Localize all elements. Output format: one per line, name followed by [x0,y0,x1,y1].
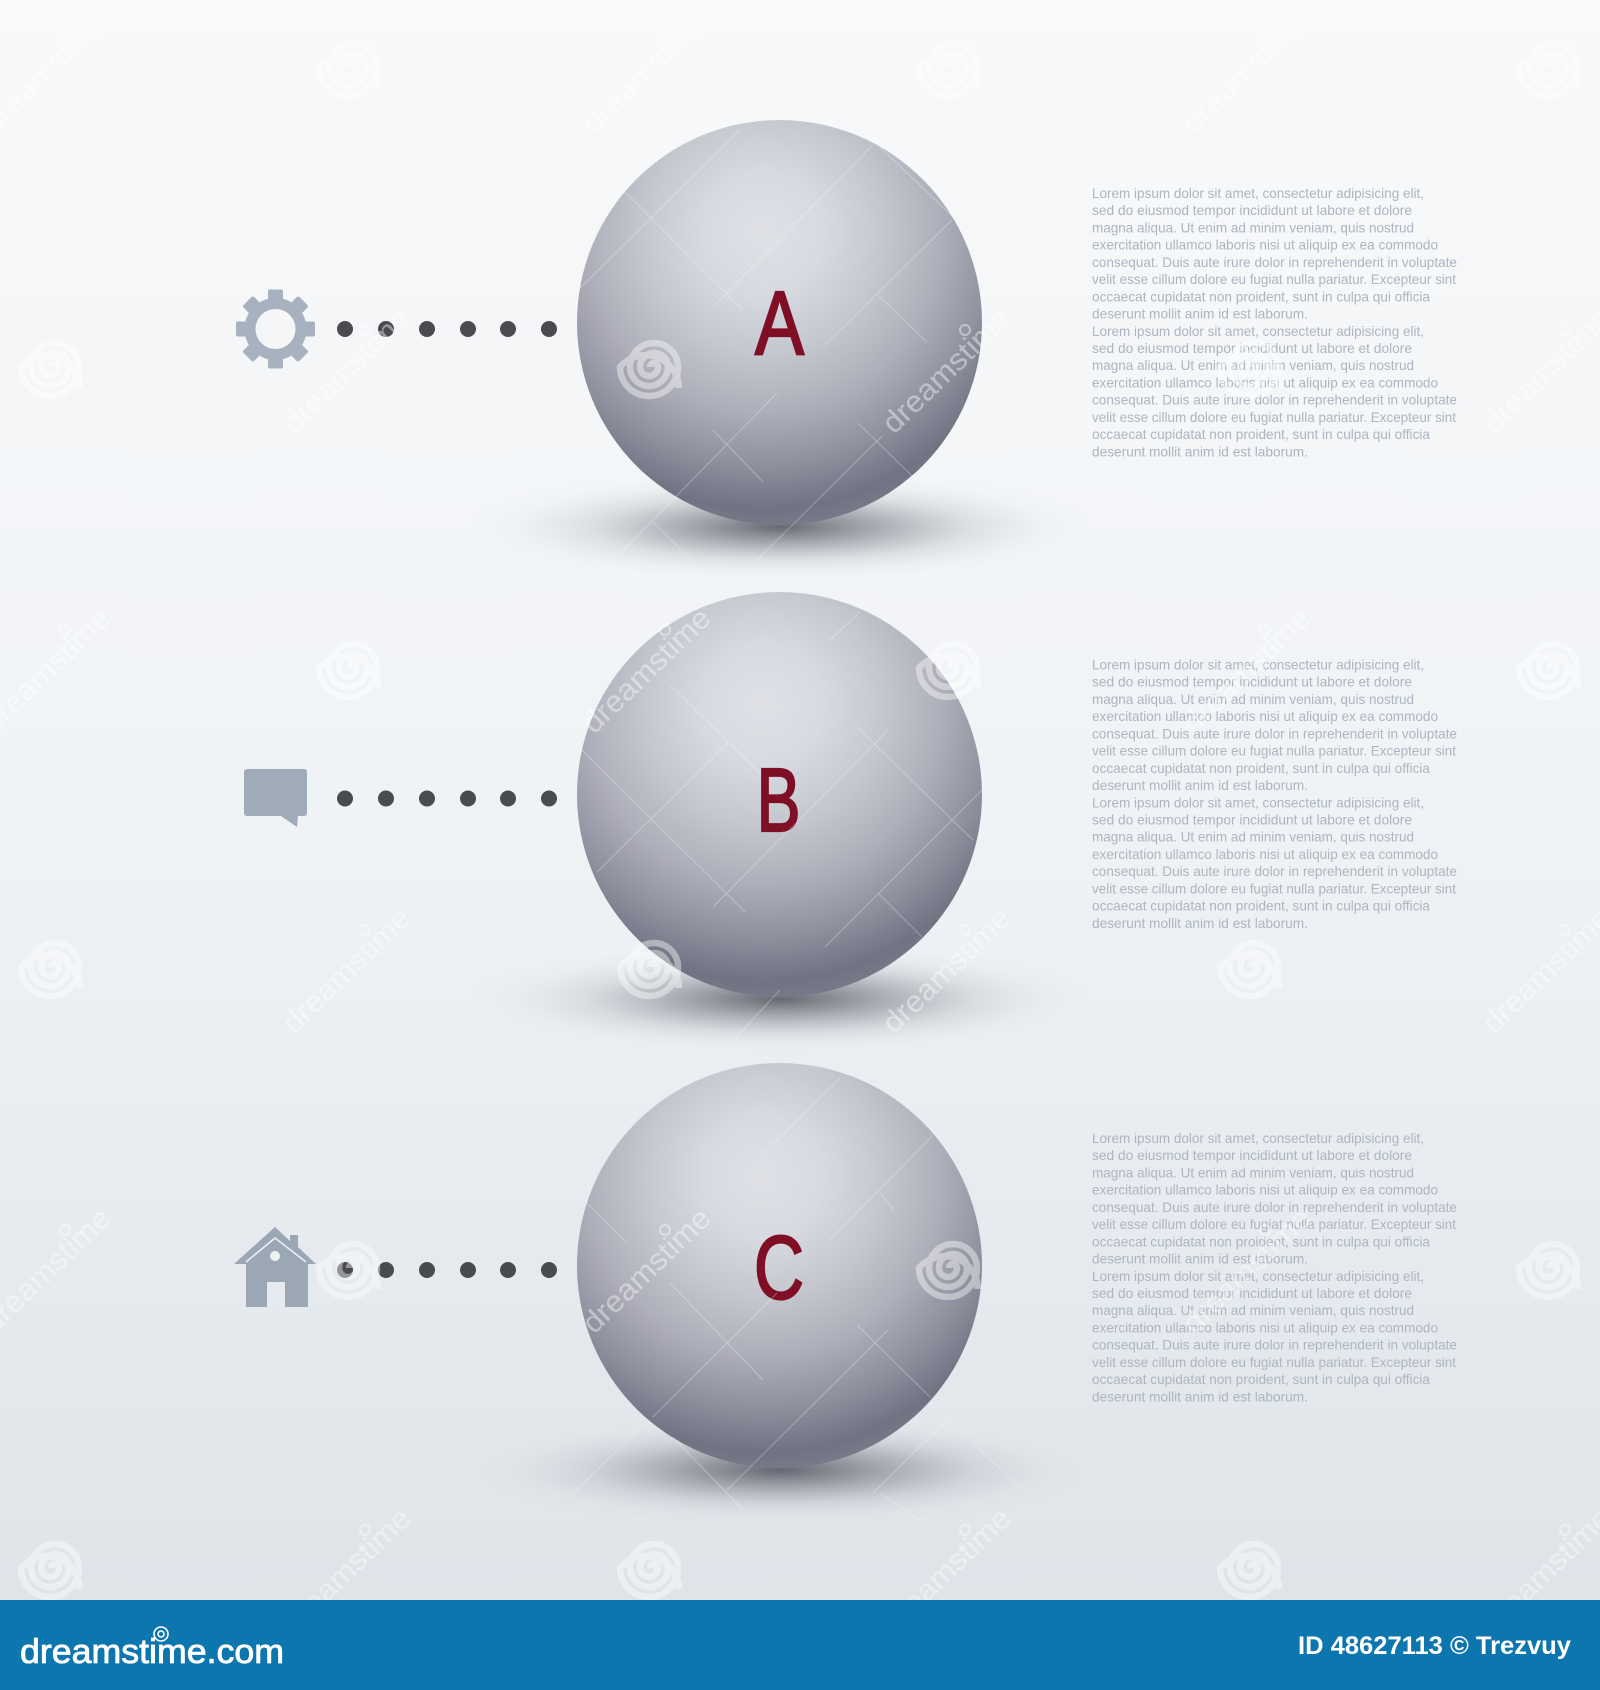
text block C: magna aliqua. Ut enim ad minim veniam, quis nostrud [1092,1164,1414,1180]
text block A: magna aliqua. Ut enim ad minim veniam, quis nostrud [1092,357,1414,373]
sphere B [577,592,982,997]
text block B: Lorem ipsum dolor sit amet, consectetur adipisicing elit, [1092,656,1424,672]
footer logo wordmark: dreamstime.com [20,1633,284,1671]
text block C: velit esse cillum dolore eu fugiat nulla pariatur. Excepteur sint [1092,1354,1456,1370]
text block A: deserunt mollit anim id est laborum. [1092,306,1308,322]
icon: gear [236,290,315,368]
dotted connector C [337,1262,557,1278]
sphere shadow B [470,945,1090,1053]
text block A: exercitation ullamco laboris nisi ut aliquip ex ea commodo [1092,236,1438,252]
text block C: consequat. Duis aute irure dolor in reprehenderit in voluptate [1092,1336,1457,1352]
text block A [1092,185,1457,460]
text block C: Lorem ipsum dolor sit amet, consectetur adipisicing elit, [1092,1268,1424,1284]
text block B [1092,656,1457,931]
sphere A [577,120,982,525]
text block C: Lorem ipsum dolor sit amet, consectetur adipisicing elit, [1092,1130,1424,1146]
text block B: sed do eiusmod tempor incididunt ut labore et dolore [1092,674,1412,690]
text block A: exercitation ullamco laboris nisi ut aliquip ex ea commodo [1092,374,1438,390]
text block B: magna aliqua. Ut enim ad minim veniam, quis nostrud [1092,691,1414,707]
panel: row C [234,1063,1457,1524]
letter A: A [755,274,804,374]
text block B: consequat. Duis aute irure dolor in reprehenderit in voluptate [1092,726,1457,742]
text block B: deserunt mollit anim id est laborum. [1092,777,1308,793]
sphere C [577,1063,982,1468]
dotted connector B [337,790,557,806]
text block A: Lorem ipsum dolor sit amet, consectetur adipisicing elit, [1092,185,1424,201]
watermark overlay: dreamstime [576,1202,718,1340]
text block B: sed do eiusmod tempor incididunt ut labore et dolore [1092,812,1412,828]
watermark overlay: dreamstime [1176,1202,1318,1340]
footer image id and credit: ID 48627113 © Trezvuy [1298,1632,1571,1660]
text block A: velit esse cillum dolore eu fugiat nulla pariatur. Excepteur sint [1092,271,1456,287]
text block A: sed do eiusmod tempor incididunt ut labore et dolore [1092,340,1412,356]
text block B: velit esse cillum dolore eu fugiat nulla pariatur. Excepteur sint [1092,880,1456,896]
icon: speech bubble [244,769,307,827]
text block A: occaecat cupidatat non proident, sunt in culpa qui officia [1092,426,1430,442]
text block C: deserunt mollit anim id est laborum. [1092,1250,1308,1266]
text block C: occaecat cupidatat non proident, sunt in culpa qui officia [1092,1234,1430,1250]
text block C: deserunt mollit anim id est laborum. [1092,1388,1308,1404]
text block C: consequat. Duis aute irure dolor in reprehenderit in voluptate [1092,1199,1457,1215]
watermark overlay: dreamstime [876,902,1018,1040]
text block C: exercitation ullamco laboris nisi ut aliquip ex ea commodo [1092,1182,1438,1198]
text block B: velit esse cillum dolore eu fugiat nulla pariatur. Excepteur sint [1092,742,1456,758]
panel: row B [244,592,1457,1053]
watermark overlay: dreamstime [1176,602,1318,740]
watermark overlay: dreamstime [576,2,718,140]
text block C [1092,1130,1457,1404]
text block A: sed do eiusmod tempor incididunt ut labore et dolore [1092,202,1412,218]
text block A: consequat. Duis aute irure dolor in reprehenderit in voluptate [1092,392,1457,408]
text block C: exercitation ullamco laboris nisi ut aliquip ex ea commodo [1092,1320,1438,1336]
text block A: magna aliqua. Ut enim ad minim veniam, quis nostrud [1092,220,1414,236]
sphere shadow A [470,473,1090,581]
text block B: Lorem ipsum dolor sit amet, consectetur adipisicing elit, [1092,794,1424,810]
icon: house [234,1227,316,1307]
text block A: velit esse cillum dolore eu fugiat nulla pariatur. Excepteur sint [1092,409,1456,425]
text block A: deserunt mollit anim id est laborum. [1092,444,1308,460]
watermark overlay: dreamstime [276,1502,418,1640]
watermark overlay: dreamstime [876,1502,1018,1640]
watermark overlay: dreamstime [1176,2,1318,140]
text block B: exercitation ullamco laboris nisi ut aliquip ex ea commodo [1092,846,1438,862]
text block B: exercitation ullamco laboris nisi ut aliquip ex ea commodo [1092,708,1438,724]
text block B: magna aliqua. Ut enim ad minim veniam, quis nostrud [1092,828,1414,844]
watermark overlay: dreamstime [576,602,718,740]
text block A: consequat. Duis aute irure dolor in reprehenderit in voluptate [1092,254,1457,270]
watermark overlay: dreamstime [276,902,418,1040]
letter C: C [754,1218,804,1318]
footer logo swirl [154,1627,168,1641]
text block B: consequat. Duis aute irure dolor in reprehenderit in voluptate [1092,863,1457,879]
text block A: Lorem ipsum dolor sit amet, consectetur adipisicing elit, [1092,323,1424,339]
text block C: sed do eiusmod tempor incididunt ut labore et dolore [1092,1147,1412,1163]
text block C: magna aliqua. Ut enim ad minim veniam, quis nostrud [1092,1302,1414,1318]
watermark overlay: dreamstime [876,302,1018,440]
text block C: velit esse cillum dolore eu fugiat nulla pariatur. Excepteur sint [1092,1216,1456,1232]
text block C: sed do eiusmod tempor incididunt ut labore et dolore [1092,1285,1412,1301]
panel: row A [236,120,1457,581]
text block A: occaecat cupidatat non proident, sunt in culpa qui officia [1092,288,1430,304]
watermark overlay: dreamstime [276,302,418,440]
text block B: deserunt mollit anim id est laborum. [1092,915,1308,931]
sphere shadow C [470,1416,1090,1524]
dotted connector A [337,321,557,337]
text block B: occaecat cupidatat non proident, sunt in culpa qui officia [1092,760,1430,776]
text block B: occaecat cupidatat non proident, sunt in culpa qui officia [1092,898,1430,914]
footer bar [0,1600,1600,1690]
text block C: occaecat cupidatat non proident, sunt in culpa qui officia [1092,1371,1430,1387]
letter B: B [756,751,800,851]
